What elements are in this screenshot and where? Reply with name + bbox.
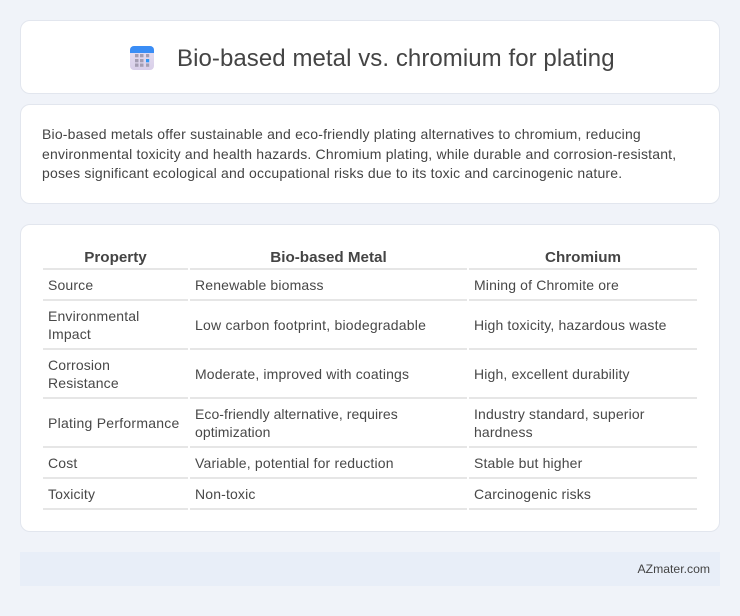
intro text: poses significant ecological and occupational risks due to its toxic and carcinogenic nature. bbox=[42, 165, 622, 181]
row: Corrosion Resistance: Corrosion bbox=[48, 357, 110, 373]
intro text: Bio-based metals offer sustainable and eco-friendly plating alternatives to chromium, reducing bbox=[42, 126, 641, 142]
row: Environmental Impact: Low carbon footprint, biodegradable bbox=[195, 317, 426, 333]
header: Bio-based Metal: Bio-based Metal bbox=[270, 249, 387, 266]
header card bbox=[20, 20, 720, 94]
footer credit: AZmater.com bbox=[638, 562, 710, 576]
row: Plating Performance: Industry standard, superior bbox=[474, 406, 645, 422]
table card bbox=[20, 224, 720, 532]
row: Plating Performance: hardness bbox=[474, 424, 533, 440]
row: Corrosion Resistance bbox=[48, 357, 630, 391]
row: Source: Renewable biomass bbox=[195, 277, 324, 293]
intro text bbox=[42, 126, 676, 181]
row: Environmental Impact: High toxicity, hazardous waste bbox=[474, 317, 667, 333]
header: Chromium: Chromium bbox=[545, 249, 621, 266]
row: Environmental Impact bbox=[48, 308, 667, 342]
row: Corrosion Resistance: Resistance bbox=[48, 375, 119, 391]
row: Toxicity: Non-toxic bbox=[195, 486, 255, 502]
row: Toxicity: Carcinogenic risks bbox=[474, 486, 591, 502]
row: Cost: Variable, potential for reduction bbox=[195, 455, 394, 471]
footer bar bbox=[20, 552, 720, 586]
row: Source: Mining of Chromite ore bbox=[474, 277, 619, 293]
row: Corrosion Resistance: High, excellent durability bbox=[474, 366, 630, 382]
row: Source: Source bbox=[48, 277, 93, 293]
row: Plating Performance bbox=[48, 406, 645, 440]
row: Plating Performance: Plating Performance bbox=[48, 415, 180, 431]
header: Property: Property bbox=[84, 249, 147, 266]
intro text: environmental toxicity and health hazards. Chromium plating, while durable and corrosion-resistant, bbox=[42, 146, 676, 162]
row: Environmental Impact: Impact bbox=[48, 326, 91, 342]
row: Toxicity: Toxicity bbox=[48, 486, 95, 502]
row: Toxicity bbox=[48, 486, 591, 502]
row: Plating Performance: optimization bbox=[195, 424, 270, 440]
intro card bbox=[20, 104, 720, 204]
row: Corrosion Resistance: Moderate, improved with coatings bbox=[195, 366, 409, 382]
row: Source bbox=[48, 277, 619, 293]
title: Bio-based metal vs. chromium for plating bbox=[177, 45, 615, 72]
row: Cost bbox=[48, 455, 582, 471]
row: Plating Performance: Eco-friendly alternative, requires bbox=[195, 406, 398, 422]
row: Environmental Impact: Environmental bbox=[48, 308, 139, 324]
row: Cost: Cost bbox=[48, 455, 77, 471]
icon: calendar bbox=[130, 46, 154, 70]
row: Cost: Stable but higher bbox=[474, 455, 582, 471]
